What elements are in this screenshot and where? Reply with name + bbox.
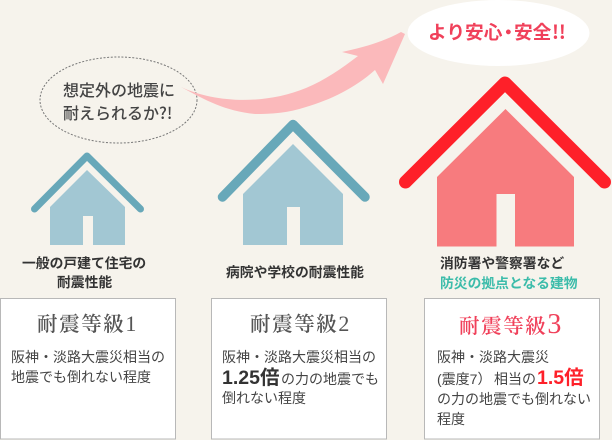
- text: grade 1 description: 阪神・淡路大震災相当の: [11, 349, 165, 365]
- icon: house 3: [406, 83, 604, 246]
- label: house 3: [440, 255, 578, 291]
- label: house 3: 消防署や警察署など: [440, 255, 564, 271]
- text: grade 2 description: 阪神・淡路大震災相当の: [222, 349, 376, 365]
- text: grade 2 description: 倒れない程度: [222, 390, 306, 406]
- text: grade 1 description: 地震でも倒れない程度: [11, 369, 151, 385]
- text: grade 3 description: 1.5倍: [537, 367, 584, 389]
- callout: more peace of mind: ・: [499, 22, 518, 43]
- label: house 1: 耐震性能: [57, 274, 112, 290]
- label: house 3: 防災の拠点となる建物: [440, 275, 578, 291]
- text: grade 2 description: [222, 349, 379, 406]
- panel: grade 1: [0, 298, 176, 439]
- arrow: rising to more safety: [181, 32, 405, 114]
- text: grade 2 description: の力の地震でも: [281, 371, 379, 387]
- text: grade 1 description: [11, 349, 165, 385]
- heading: grade 3: 耐震等級3: [459, 309, 563, 340]
- callout: more peace of mind: より安心: [428, 22, 503, 43]
- text: grade 3 description: 相当の: [494, 371, 536, 387]
- speech bubble: unexpected earthquake: [40, 57, 197, 143]
- speech bubble: unexpected earthquake: 耐えられるか?!: [63, 100, 172, 124]
- callout: more peace of mind: 安全: [514, 22, 552, 43]
- icon: house 2: [222, 124, 365, 245]
- panel: grade 2: [212, 298, 386, 439]
- label: house 2: 病院や学校の耐震性能: [226, 264, 364, 280]
- icon: house 1: [34, 156, 140, 245]
- speech bubble: unexpected earthquake: 想定外の地震に: [63, 82, 175, 100]
- text: grade 3 description: の力の地震でも倒れない: [437, 391, 591, 407]
- callout: more peace of mind: [408, 0, 590, 66]
- heading: grade 1: 耐震等級1: [37, 311, 138, 336]
- label: house 1: 一般の戸建て住宅の: [22, 255, 146, 271]
- label: house 1: [22, 255, 146, 290]
- text: grade 3 description: 阪神・淡路大震災: [437, 349, 549, 365]
- heading: grade 2: 耐震等級2: [250, 311, 351, 336]
- text: grade 3 description: [437, 349, 591, 427]
- panel: grade 3: [424, 298, 600, 439]
- text: grade 3 description: 程度: [437, 411, 465, 427]
- callout: more peace of mind: !!: [552, 18, 566, 45]
- text: grade 2 description: 1.25倍: [222, 367, 279, 389]
- text: grade 3 description: (震度7）: [437, 371, 491, 387]
